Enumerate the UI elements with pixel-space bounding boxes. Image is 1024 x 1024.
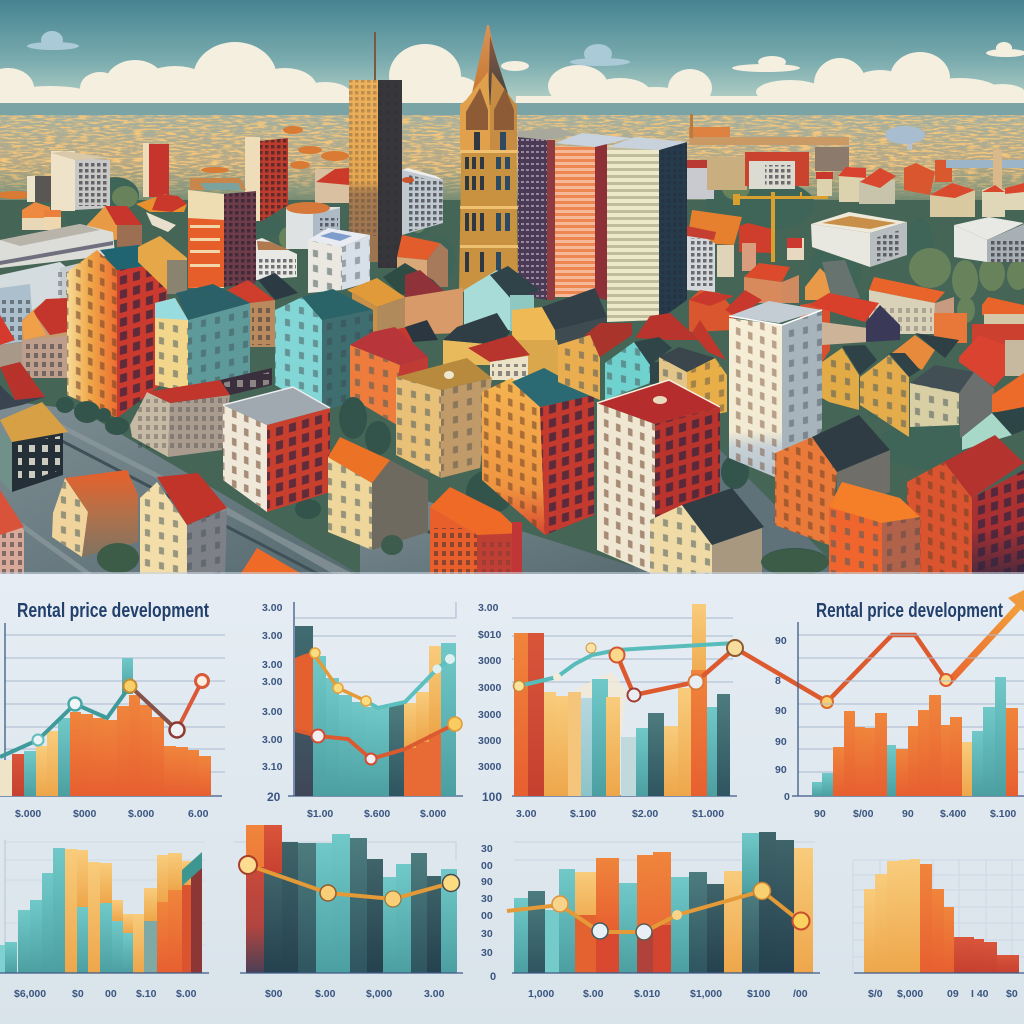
y axis labels: chart two: 3.00 [262, 630, 283, 642]
yellow house behind main tower [138, 236, 187, 294]
axis labels: top left chart: 6.00 [188, 808, 209, 820]
axis labels: chart four: $.100 [990, 808, 1016, 820]
y axis labels: chart seven: 30 [481, 893, 493, 905]
trees front [97, 543, 829, 575]
y axis labels: chart seven: 0 [490, 971, 496, 983]
building: white and red block [223, 387, 330, 512]
y axis labels: chart three: 3000 [478, 682, 502, 694]
axis labels: chart four: 90 [902, 808, 914, 820]
y axis labels: chart seven: 90 [481, 876, 493, 888]
axis labels: bottom right chart: $0 [1006, 988, 1018, 1000]
back buildings left [22, 137, 443, 235]
y axis labels: chart four: 8 [775, 675, 781, 687]
axis labels: top left chart: $.000 [15, 808, 41, 820]
y axis labels: chart four [775, 635, 790, 803]
building: white block with blue roof [308, 228, 370, 293]
axis labels: bottom second chart [265, 988, 445, 1000]
houses bottom left [0, 470, 522, 575]
axis labels: chart three [516, 808, 724, 820]
axis labels: bottom third chart: $.010 [634, 988, 660, 1000]
icon: construction crane [733, 192, 828, 262]
heading: left title: Rental price development [17, 600, 209, 622]
axis labels: bottom right chart: $/0 [868, 988, 883, 1000]
axis labels: bottom left chart: $.00 [176, 988, 197, 1000]
midground base [0, 200, 1024, 575]
building: cream striped block [607, 137, 687, 322]
tree [381, 535, 403, 555]
building: orange house right [829, 482, 920, 575]
y axis labels: chart four: 0 [784, 791, 790, 803]
building: orange and red block [350, 327, 428, 425]
axis labels: chart four: $.400 [940, 808, 966, 820]
axis labels: bottom third chart [528, 988, 808, 1000]
y axis labels: chart three: 3000 [478, 735, 502, 747]
building: white block right [811, 212, 907, 267]
mid row houses centre back [0, 235, 726, 382]
axis labels: bottom second chart: $.00 [315, 988, 336, 1000]
axis labels: bottom second chart: $00 [265, 988, 283, 1000]
orange roofed house beside tower [136, 194, 187, 232]
axis labels: bottom left chart [14, 988, 197, 1000]
y axis labels: chart seven: 30 [481, 843, 493, 855]
axis labels: bottom right chart: $,000 [897, 988, 923, 1000]
chart: bottom second bars and line [234, 825, 463, 973]
y axis labels: chart three: 3000 [478, 761, 502, 773]
white round building [286, 202, 340, 249]
y axis labels: chart seven: 30 [481, 947, 493, 959]
axis labels: bottom third chart: 1,000 [528, 988, 554, 1000]
building: purple block [518, 128, 575, 300]
chart: top left bars and line [0, 623, 225, 796]
axis labels: bottom third chart: $1,000 [690, 988, 722, 1000]
y axis labels: chart two [262, 602, 283, 804]
building: church tower [459, 25, 518, 292]
building: white low block [256, 238, 297, 280]
y axis labels: chart seven [481, 843, 496, 983]
building: teal block centre [275, 289, 373, 412]
axis labels: chart two: $.000 [420, 808, 446, 820]
building: orange tall block [482, 368, 594, 535]
y axis labels: chart two: 3.00 [262, 659, 283, 671]
axis labels: bottom third chart: $100 [747, 988, 771, 1000]
axis labels: bottom left chart: 00 [105, 988, 117, 1000]
axis labels: chart two [307, 808, 446, 820]
chart: top right bars [792, 622, 1024, 796]
axis labels: chart three: 3.00 [516, 808, 537, 820]
y axis labels: chart two: 3.00 [262, 734, 283, 746]
crane support houses and orange roof block [687, 210, 804, 292]
building: yellow block [396, 358, 492, 478]
y axis labels: chart two: 3.00 [262, 602, 283, 614]
axis labels: chart three: $2.00 [632, 808, 658, 820]
axis labels: chart four [814, 808, 1016, 820]
building: cream house dark roof [650, 488, 764, 575]
building: cream house orange roof [328, 437, 428, 550]
distant landscape [0, 103, 1024, 117]
chart: bottom third bars and line [507, 832, 820, 973]
y axis labels: chart seven: 30 [481, 928, 493, 940]
y axis labels: chart three: 3000 [478, 655, 502, 667]
trees [56, 397, 829, 576]
axis labels: bottom second chart: $,000 [366, 988, 392, 1000]
y axis labels: chart two: 3.00 [262, 676, 283, 688]
building: teal block left [155, 284, 250, 392]
y axis labels: chart two: 20 [267, 790, 281, 804]
building: white and red large block [597, 380, 720, 575]
clouds [0, 42, 1024, 114]
panel: charts background [0, 574, 1024, 1024]
axis labels: chart two: $1.00 [307, 808, 333, 820]
y axis labels: chart seven: 00 [481, 860, 493, 872]
axis labels: bottom third chart: /00 [793, 988, 808, 1000]
yellow grey house beside main tower [138, 236, 187, 294]
axis labels: bottom right chart: 09 [947, 988, 959, 1000]
axis labels: top left chart: $000 [73, 808, 97, 820]
forest trees back [64, 177, 982, 469]
y axis labels: chart four: 90 [775, 736, 787, 748]
axis labels: top left chart [15, 808, 209, 820]
building: beige red roof [130, 368, 272, 457]
axis labels: bottom third chart: $.00 [583, 988, 604, 1000]
y axis labels: chart three: 3000 [478, 709, 502, 721]
axis labels: chart three: $.100 [570, 808, 596, 820]
axis labels: bottom left chart: $0 [72, 988, 84, 1000]
y axis labels: chart two: 3.10 [262, 761, 283, 773]
mid row teal and yellow houses [558, 335, 727, 420]
axis labels: bottom second chart: 3.00 [424, 988, 445, 1000]
panel: city illustration [0, 0, 1024, 576]
axis labels: top left chart: $.000 [128, 808, 154, 820]
y axis labels: chart two: 3.00 [262, 706, 283, 718]
building: orange roof house [430, 487, 522, 575]
chart: bottom left stacked bars [0, 840, 209, 973]
building: dark house with yellow roof [0, 362, 68, 492]
chart: bottom right bars and grid [853, 859, 1024, 973]
axis labels: chart two: $.600 [364, 808, 390, 820]
axis labels: bottom right chart [868, 988, 1018, 1000]
white long block left [0, 224, 115, 345]
building: red block far right [907, 435, 1024, 575]
axis labels: bottom left chart: $.10 [136, 988, 157, 1000]
y axis labels: chart four: 90 [775, 764, 787, 776]
chart: top second bars and lines [288, 602, 463, 796]
distant rooftops and far buildings right [687, 114, 1024, 217]
y axis labels: chart four: 90 [775, 705, 787, 717]
building: brown skyscraper [349, 32, 402, 268]
building: white block far right [954, 217, 1024, 262]
y axis labels: chart four: 90 [775, 635, 787, 647]
orange house back left [87, 206, 142, 247]
mid row houses right back [689, 260, 1024, 362]
chart: top third bars and lines [512, 590, 1024, 796]
y axis labels: chart three: $010 [478, 629, 502, 641]
axis labels: bottom right chart: I 40 [971, 988, 989, 1000]
y axis labels: chart three [478, 602, 502, 804]
sky [0, 0, 1024, 108]
building: red tower with cream top [188, 178, 256, 288]
cream house with red roof [443, 313, 530, 380]
axis labels: chart four: $/00 [853, 808, 874, 820]
y axis labels: chart three: 100 [482, 790, 502, 804]
axis labels: chart four: 90 [814, 808, 826, 820]
mid row houses right front [822, 333, 1024, 450]
axis labels: bottom left chart: $6,000 [14, 988, 46, 1000]
building: salmon block [555, 133, 632, 300]
building: orange and yellow main tower [67, 245, 167, 418]
building: red house dark roof [775, 415, 890, 545]
axis labels: chart three: $1.000 [692, 808, 724, 820]
building: tall white block [729, 301, 822, 480]
y axis labels: chart three: 3.00 [478, 602, 499, 614]
y axis labels: chart seven: 00 [481, 910, 493, 922]
